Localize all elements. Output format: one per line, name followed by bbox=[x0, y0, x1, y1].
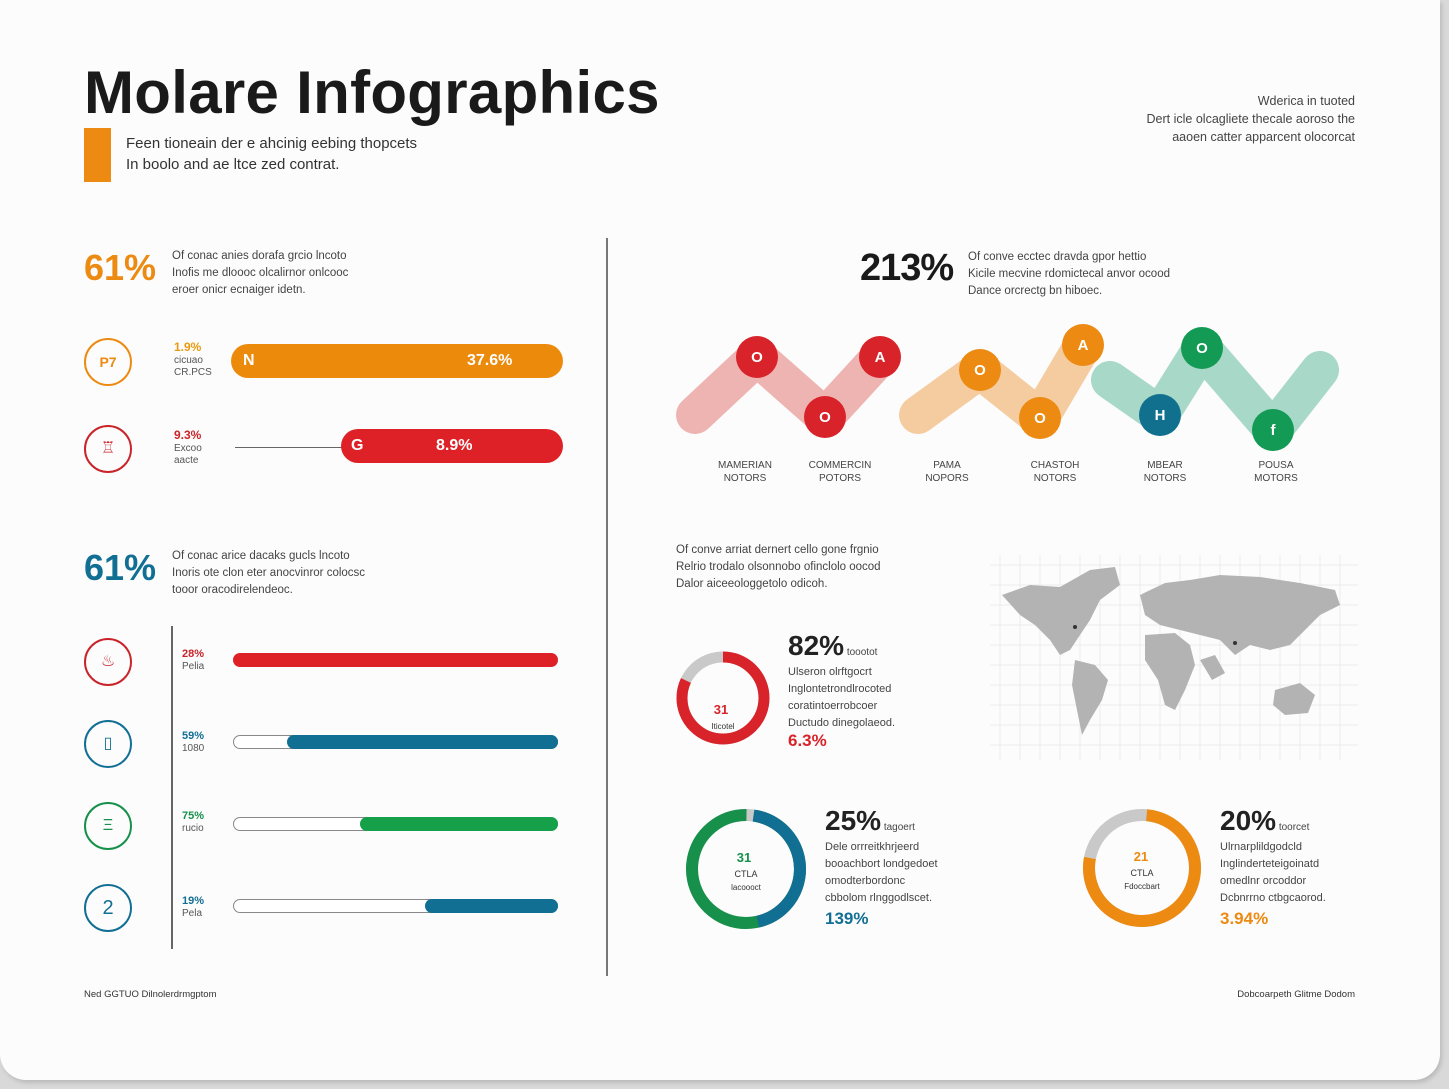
footer left: Ned GGTUO Dilnolerdrmgptom bbox=[84, 989, 217, 1000]
donut: 25% green/blue: 139% bbox=[825, 909, 868, 928]
donut: 82% red: Inglontetrondlrocoted bbox=[788, 683, 891, 695]
wave chart: MOTORS bbox=[1254, 473, 1298, 484]
donut: 20% orange: omedlnr orcoddor bbox=[1220, 875, 1306, 887]
header note: Dert icle olcagliete thecale aoroso the bbox=[1147, 112, 1355, 126]
row 4 bbox=[84, 884, 558, 932]
footer right: Dobcoarpeth Glitme Dodom bbox=[1237, 989, 1355, 1000]
donut: 25% green/blue: CTLA bbox=[734, 869, 758, 879]
stat: 61% blue: tooor oracodirelendeoc. bbox=[172, 584, 293, 596]
donut: 82% red: 82% toootot bbox=[788, 630, 877, 661]
donut: 82% red: 6.3% bbox=[788, 731, 827, 750]
wave chart: NOTORS bbox=[1144, 473, 1187, 484]
bar row red: G bbox=[351, 437, 363, 454]
row 1 bbox=[84, 638, 558, 686]
stat: 213% bbox=[860, 247, 1170, 297]
donut: 25% green/blue: 31 bbox=[737, 850, 751, 865]
donut: 20% orange: 20% toorcet bbox=[1220, 805, 1309, 836]
bar row red: ♖ bbox=[101, 440, 115, 457]
stat: 213%: Dance orcrectg bn hiboec. bbox=[968, 285, 1102, 297]
title: Molare Infographics bbox=[84, 59, 660, 126]
wave chart: A bbox=[1078, 337, 1089, 354]
stat: 61% orange bbox=[84, 247, 348, 296]
donut: 82% red: coratintoerrobcoer bbox=[788, 700, 877, 712]
stat: 61% blue: 61% bbox=[84, 547, 156, 588]
divider bbox=[606, 238, 608, 976]
wave chart: CHASTOH bbox=[1031, 460, 1079, 471]
bar row red: Excoo bbox=[174, 443, 202, 454]
wave chart: A bbox=[875, 349, 886, 366]
donut: 25% green/blue: lacoooct bbox=[731, 883, 762, 892]
stat: 61% blue: Of conac arice dacaks gucls lncoto bbox=[172, 550, 350, 562]
wave chart: O bbox=[974, 362, 986, 379]
header note: aaoen catter apparcent olocorcat bbox=[1172, 130, 1355, 144]
donut: 20% orange: Dcbnrrno ctbgcaorod. bbox=[1220, 892, 1326, 904]
donut: 25% green/blue: Dele orrreitkhrjeerd bbox=[825, 841, 919, 853]
map description bbox=[676, 544, 881, 590]
bar row red: 8.9% bbox=[436, 437, 472, 454]
donut: 82% red bbox=[676, 630, 895, 750]
wave chart: PAMA bbox=[933, 460, 961, 471]
map description: Dalor aiceeologgetolo odicoh. bbox=[676, 578, 828, 590]
wave chart: O bbox=[751, 349, 763, 366]
donut: 20% orange: Ulrnarplildgodcld bbox=[1220, 841, 1302, 853]
donut: 20% orange: Inglinderteteigoinatd bbox=[1220, 858, 1319, 870]
progress rows bbox=[84, 638, 558, 932]
donut: 20% orange: CTLA bbox=[1130, 868, 1154, 878]
bar row red: 9.3% bbox=[174, 428, 201, 442]
wave chart: POUSA bbox=[1258, 460, 1294, 471]
wave chart: POTORS bbox=[819, 473, 861, 484]
stat: 213%: 213% bbox=[860, 247, 953, 289]
bar row orange: 37.6% bbox=[467, 352, 512, 369]
row 1: ♨ bbox=[101, 653, 115, 670]
wave chart: NOPORS bbox=[925, 473, 969, 484]
row 4: 2 bbox=[102, 897, 114, 919]
row 4: Pela bbox=[182, 908, 202, 919]
stat: 61% orange: 61% bbox=[84, 247, 156, 288]
wave chart: O bbox=[1196, 340, 1208, 357]
row 1: Pelia bbox=[182, 661, 204, 672]
wave chart: O bbox=[1034, 410, 1046, 427]
stat: 61% orange: Of conac anies dorafa grcio lncoto bbox=[172, 250, 347, 262]
bar row orange: N bbox=[243, 352, 255, 369]
wave chart: NOTORS bbox=[724, 473, 767, 484]
bar row orange bbox=[84, 338, 563, 386]
donut: 25% green/blue: omodterbordonc bbox=[825, 875, 905, 887]
stat: 61% orange: Inofis me dloooc olcalirnor onlcooc bbox=[172, 267, 348, 279]
wave chart bbox=[676, 324, 1339, 484]
vertical axis line bbox=[171, 626, 173, 949]
donut: 82% red: 31 bbox=[714, 702, 728, 717]
donut: 82% red: Ulseron olrftgocrt bbox=[788, 666, 872, 678]
donut: 25% green/blue bbox=[686, 805, 938, 929]
row 2 bbox=[84, 720, 558, 768]
donut: 20% orange: 3.94% bbox=[1220, 909, 1268, 928]
donut: 25% green/blue: cbbolom rlnggodlscet. bbox=[825, 892, 932, 904]
wave chart: MBEAR bbox=[1147, 460, 1183, 471]
donut: 20% orange: Fdoccbart bbox=[1124, 882, 1161, 891]
bar row orange: CR.PCS bbox=[174, 367, 212, 378]
stat: 61% blue bbox=[84, 547, 365, 596]
donut: 82% red: Ductudo dinegolaeod. bbox=[788, 717, 895, 729]
stat: 213%: Of conve ecctec dravda gpor hettio bbox=[968, 251, 1146, 263]
wave chart: COMMERCIN bbox=[809, 460, 871, 471]
bar row orange: P7 bbox=[99, 354, 117, 370]
donut: 20% orange: 21 bbox=[1134, 849, 1148, 864]
world map bbox=[990, 555, 1358, 760]
wave chart: O bbox=[819, 409, 831, 426]
stat: 213%: Kicile mecvine rdomictecal anvor ocood bbox=[968, 268, 1170, 280]
map description: Of conve arriat dernert cello gone frgnio bbox=[676, 544, 879, 556]
wave chart: f bbox=[1270, 422, 1276, 439]
subtitle with accent bar: In boolo and ae ltce zed contrat. bbox=[126, 156, 339, 173]
bar row red: aacte bbox=[174, 455, 198, 466]
row 3: Ξ bbox=[103, 817, 113, 834]
donut: 82% red: Iticotel bbox=[711, 722, 735, 731]
bar row orange: cicuao bbox=[174, 355, 203, 366]
bar row orange: 1.9% bbox=[174, 340, 201, 354]
wave chart: MAMERIAN bbox=[718, 460, 772, 471]
row 3: rucio bbox=[182, 823, 204, 834]
row 2: 59% bbox=[182, 730, 204, 742]
row 2: 1080 bbox=[182, 743, 204, 754]
wave chart: H bbox=[1155, 407, 1165, 424]
row 3 bbox=[84, 802, 558, 850]
row 1: 28% bbox=[182, 648, 204, 660]
bar row red bbox=[84, 425, 563, 473]
stat: 61% blue: Inoris ote clon eter anocvinror colocsc bbox=[172, 567, 365, 579]
map description: Relrio trodalo olsonnobo ofinclolo oocod bbox=[676, 561, 881, 573]
row 3: 75% bbox=[182, 810, 204, 822]
header note: Wderica in tuoted bbox=[1258, 94, 1355, 108]
row 2: ▯ bbox=[104, 735, 112, 752]
row 4: 19% bbox=[182, 895, 204, 907]
stat: 61% orange: eroer onicr ecnaiger idetn. bbox=[172, 284, 306, 296]
header note bbox=[1147, 94, 1355, 144]
donut: 25% green/blue: booachbort londgedoet bbox=[825, 858, 938, 870]
donut: 20% orange bbox=[1083, 805, 1326, 928]
subtitle with accent bar bbox=[84, 128, 417, 182]
donut: 25% green/blue: 25% tagoert bbox=[825, 805, 915, 836]
subtitle with accent bar: Feen tioneain der e ahcinig eebing thopcets bbox=[126, 135, 417, 152]
wave chart: NOTORS bbox=[1034, 473, 1077, 484]
